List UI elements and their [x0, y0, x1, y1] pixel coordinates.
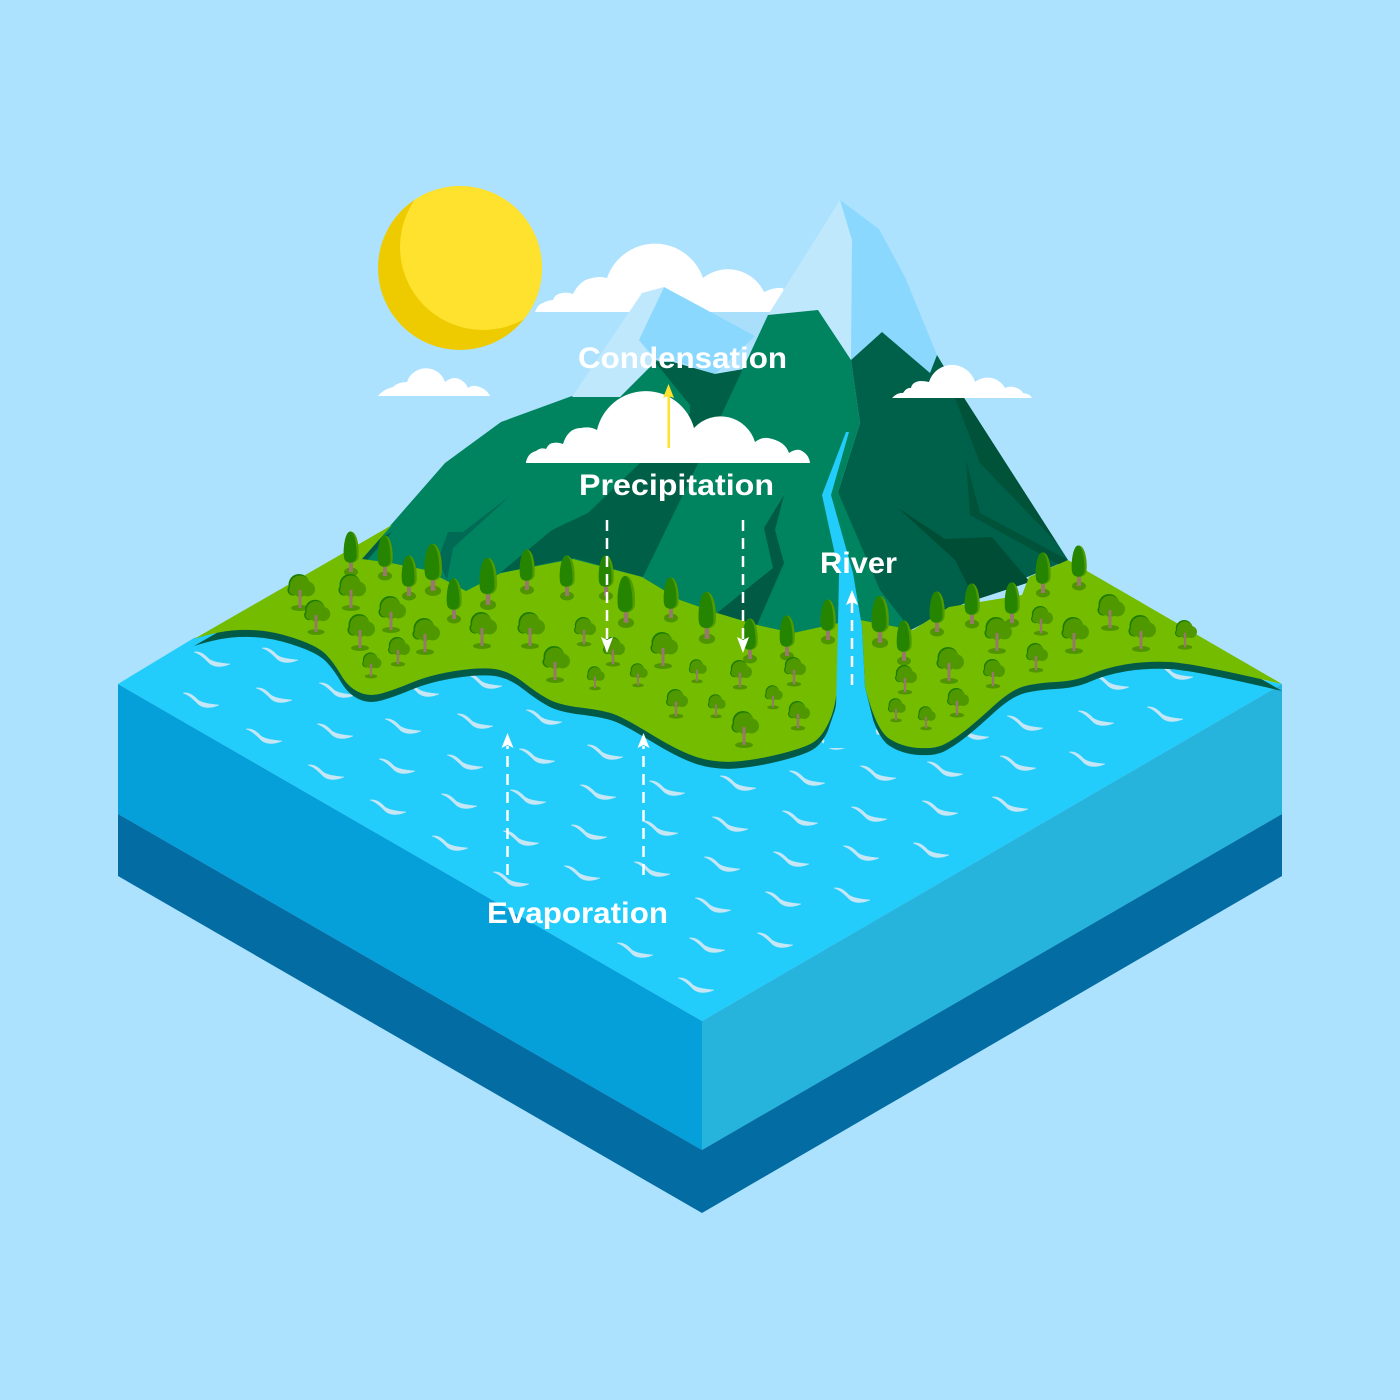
left face upper layer: [118, 684, 702, 1150]
icon: sun: [378, 186, 542, 350]
left mountain crease: [438, 496, 510, 580]
arrow: evaporation left: [502, 733, 514, 875]
right mountain: [838, 332, 1068, 630]
right mountain edge shade: [955, 398, 1068, 560]
water surface: [118, 625, 1282, 1021]
land: [194, 525, 1282, 762]
right face lower layer: [702, 814, 1282, 1213]
icon: main cloud: [526, 391, 810, 463]
forest: round trees: [288, 574, 1197, 748]
isometric slab: [118, 684, 1282, 1213]
land shoreline edge: [194, 532, 1282, 769]
left face lower layer: [118, 814, 702, 1213]
left peak shoulder: [700, 312, 770, 345]
label: Precipitation: Precipitation: [579, 469, 774, 502]
icon: back cloud: [535, 244, 790, 312]
water ripples: [183, 648, 1193, 993]
left peak pale snow: [572, 287, 664, 397]
right mountain ridge shade: [966, 460, 1068, 565]
arrow: condensation up: [663, 384, 674, 448]
central peak pale snow: [768, 200, 852, 360]
river: [822, 432, 880, 748]
arrow: river up: [846, 590, 858, 685]
icon: left small cloud: [378, 368, 490, 396]
label: River: River: [820, 547, 897, 580]
central mountain: [643, 310, 911, 640]
central mountain crease: [717, 495, 784, 625]
mountains: [362, 200, 1068, 640]
label: Evaporation: Evaporation: [487, 897, 668, 930]
forest: slender trees: [344, 532, 1087, 666]
label: Condensation: Condensation: [578, 342, 787, 375]
left mountain shadow: [500, 362, 750, 577]
right mountain lower shade: [898, 508, 1030, 600]
arrow: precipitation right: [737, 520, 749, 653]
arrow: precipitation left: [601, 520, 613, 653]
central peak blue snow: [840, 200, 937, 373]
left mountain: [362, 360, 750, 640]
right face upper layer: [702, 684, 1282, 1150]
icon: right cloud: [892, 365, 1032, 398]
left peak blue snow: [639, 287, 755, 374]
arrow: evaporation right: [638, 733, 650, 875]
